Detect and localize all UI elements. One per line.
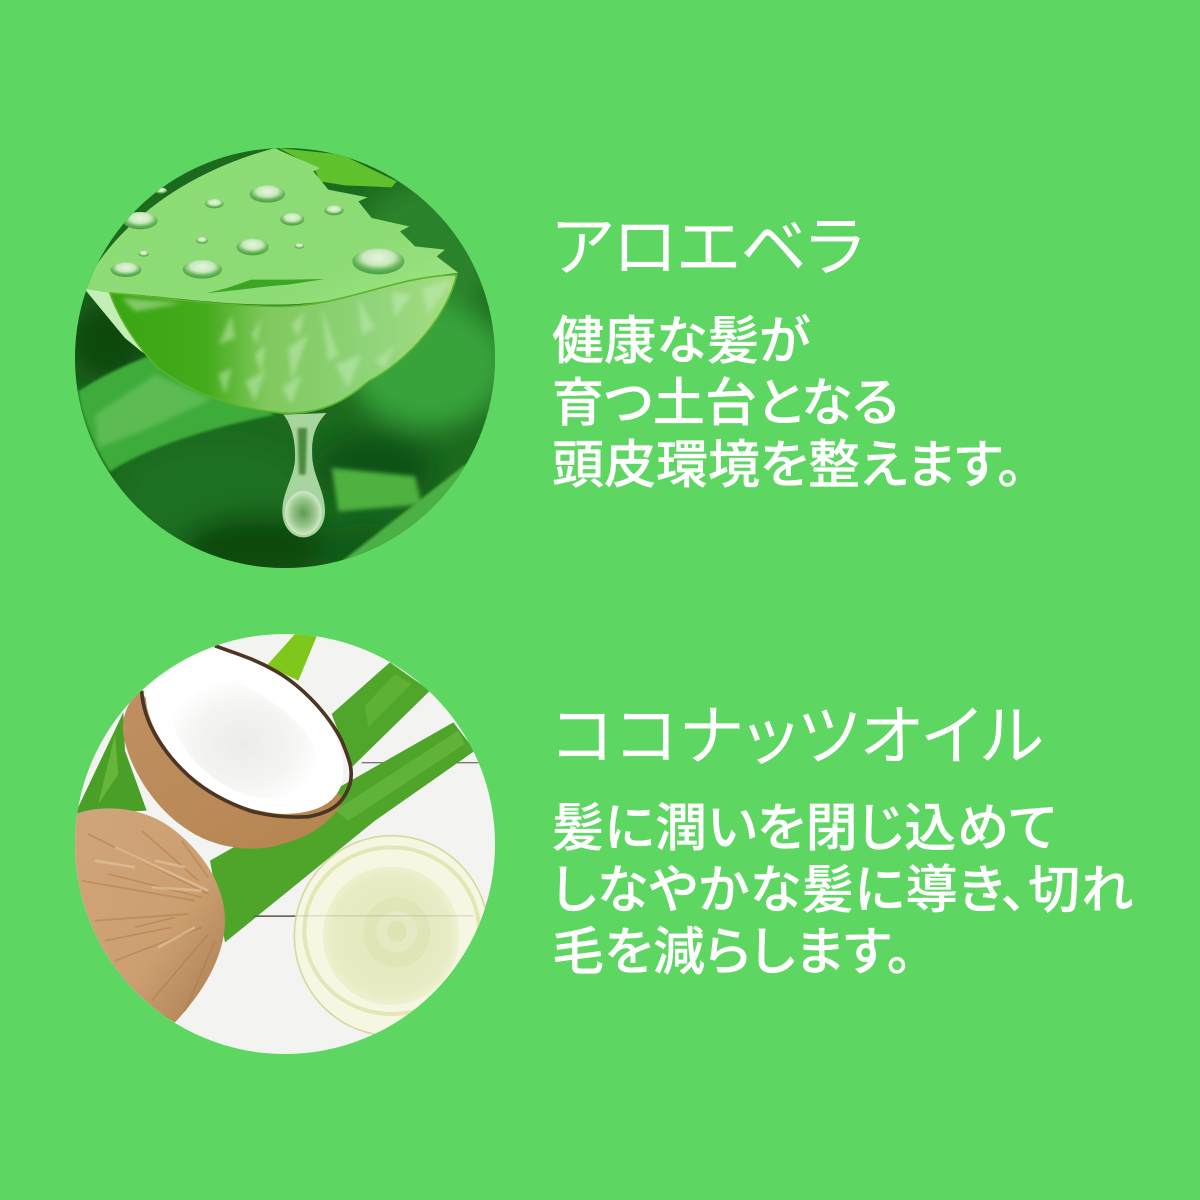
upper leaf skin (84, 148, 458, 351)
text: aloe vera description: 健康な髪が (552, 313, 810, 371)
cut gel face (110, 275, 457, 413)
whole coconut (75, 808, 225, 1022)
water droplets (111, 185, 404, 279)
text: coconut oil description (552, 800, 1134, 982)
small top leaf (278, 148, 397, 187)
text: coconut oil description: 毛を減らします。 (552, 924, 913, 982)
icon: aloe vera photo circle (75, 148, 495, 568)
text: aloe vera description (552, 313, 1023, 495)
gel drop (282, 413, 327, 537)
palm fronds (75, 634, 475, 942)
icon: coconut photo circle (75, 634, 495, 1054)
oil bowl (294, 836, 489, 1036)
heading: aloe vera: アロエベラ (552, 210, 863, 284)
text: aloe vera description: 頭皮環境を整えます。 (552, 437, 1023, 495)
coconut half (123, 646, 351, 849)
text: aloe vera description: 育つ土台となる (552, 375, 899, 433)
heading: coconut oil: ココナッツオイル (552, 699, 1045, 773)
text: coconut oil description: 髪に潤いを閉じ込めて (552, 800, 1057, 858)
text: coconut oil description: しなやかな髪に導き、切れ (552, 862, 1134, 920)
